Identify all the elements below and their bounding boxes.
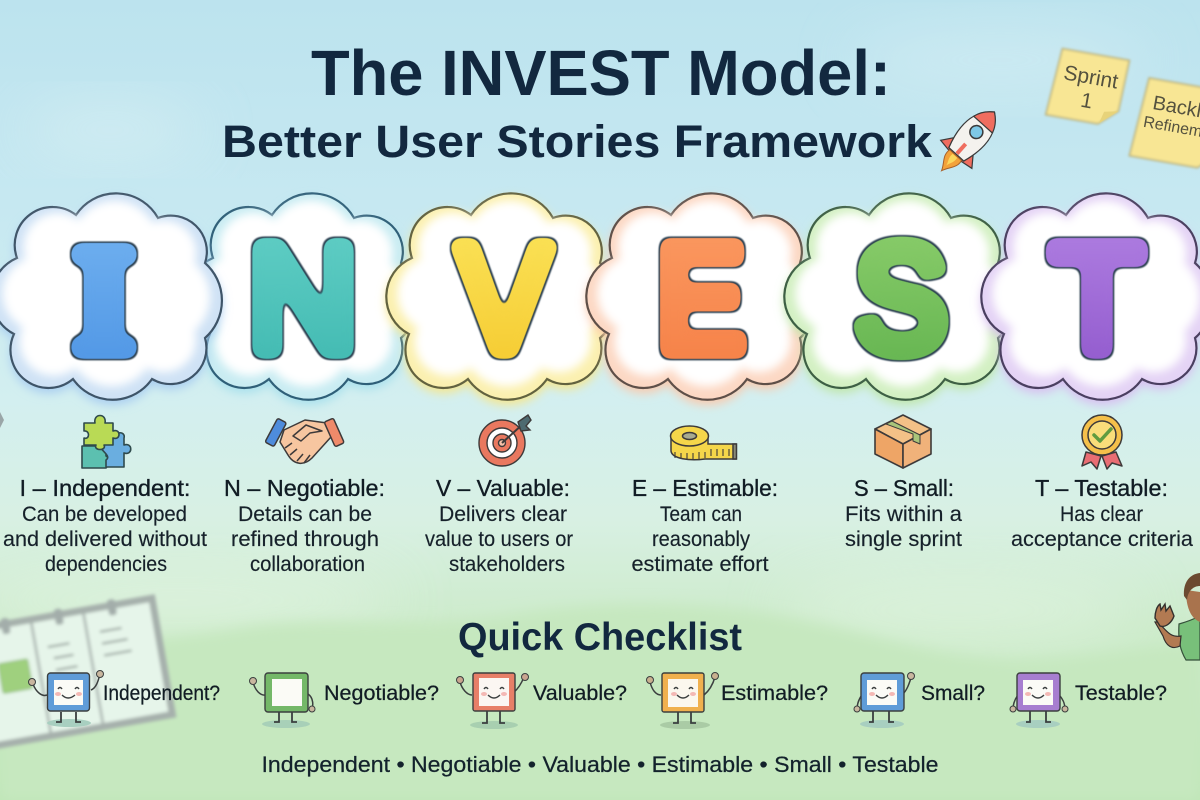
panel: cloud V bbox=[386, 193, 617, 405]
illustration: waving person bbox=[1155, 573, 1200, 660]
checklist item: Testable bbox=[1010, 673, 1167, 728]
icon: cardboard box bbox=[875, 415, 931, 468]
text block: Independent: I – Independent: bbox=[20, 475, 190, 501]
text block: Independent: dependencies bbox=[45, 553, 167, 576]
text block: Estimable: estimate effort bbox=[632, 553, 769, 576]
heading: Quick Checklist: Quick Checklist bbox=[458, 616, 742, 659]
text block: Negotiable: refined through bbox=[231, 528, 379, 551]
icon: target with arrow bbox=[479, 415, 531, 466]
text block: Testable: Has clear bbox=[1060, 503, 1143, 526]
letter E: E bbox=[657, 214, 745, 382]
checklist item: Negotiable bbox=[250, 673, 439, 728]
sticky note: Backlog Refinement bbox=[1129, 77, 1200, 171]
text block: Valuable: value to users or bbox=[425, 528, 573, 551]
mascot: orange bbox=[646, 672, 718, 729]
text block: Valuable: stakeholders bbox=[449, 553, 565, 576]
text block: Valuable bbox=[425, 475, 573, 576]
checklist item: Small bbox=[854, 672, 985, 728]
icon: puzzle bbox=[82, 416, 131, 468]
text block: Independent: and delivered without bbox=[3, 528, 207, 551]
checklist item: Estimable bbox=[646, 672, 828, 729]
text block: Estimable bbox=[632, 475, 778, 576]
mascot: green bbox=[250, 673, 315, 728]
label: Estimable? bbox=[721, 681, 828, 705]
text block: Small: single sprint bbox=[845, 528, 962, 551]
icon: rocket bbox=[926, 98, 1010, 185]
title line 2: Better User Stories Framework bbox=[222, 116, 933, 167]
title line 1: The INVEST Model: bbox=[311, 37, 891, 109]
text block: Small bbox=[845, 475, 962, 551]
panel: cloud T bbox=[981, 193, 1200, 405]
text block: Testable: acceptance criteria bbox=[1011, 528, 1193, 551]
text block: Estimable: reasonably bbox=[652, 528, 750, 551]
panel: cloud I bbox=[0, 193, 222, 405]
letter V: V bbox=[458, 215, 550, 382]
letter I: I bbox=[75, 217, 133, 383]
illustration: kanban board bbox=[0, 592, 172, 748]
icon: award badge bbox=[1082, 415, 1122, 469]
mascot: purple bbox=[1010, 673, 1068, 728]
checklist item: Valuable bbox=[456, 673, 627, 729]
text block: Estimable: Team can bbox=[660, 503, 742, 526]
footer summary line: Independent • Negotiable • Valuable • Estimable • Small • Testable bbox=[262, 752, 938, 777]
icon: measuring tape bbox=[670, 426, 736, 460]
note text: Sprint bbox=[1062, 61, 1120, 94]
mascot: blue small bbox=[854, 672, 914, 728]
text block: Small: Fits within a bbox=[845, 503, 962, 526]
text block: Valuable: Delivers clear bbox=[439, 503, 567, 526]
partial icon at left edge bbox=[0, 412, 4, 428]
label: Valuable? bbox=[533, 681, 627, 705]
text block: Negotiable: collaboration bbox=[250, 553, 365, 576]
icon: handshake bbox=[265, 418, 344, 463]
mascot: red bbox=[456, 673, 528, 729]
letter S: S bbox=[855, 215, 947, 382]
label: Independent? bbox=[103, 681, 220, 705]
text block: Testable bbox=[1011, 475, 1193, 551]
text block: Valuable: V – Valuable: bbox=[436, 475, 570, 501]
text block: Small: S – Small: bbox=[854, 475, 954, 501]
text block: Negotiable bbox=[224, 475, 385, 576]
heading: title bbox=[222, 37, 933, 167]
label: Negotiable? bbox=[324, 681, 439, 705]
mascot: blue bbox=[28, 670, 104, 727]
label: Small? bbox=[921, 681, 985, 705]
text block: Independent: Can be developed bbox=[22, 503, 187, 526]
text block: Independent bbox=[3, 475, 207, 576]
letter N: N bbox=[249, 214, 357, 382]
label: Testable? bbox=[1075, 681, 1167, 705]
checklist item: Independent bbox=[28, 670, 220, 727]
text block: Negotiable: N – Negotiable: bbox=[224, 475, 385, 501]
sticky note: Sprint 1 bbox=[1046, 48, 1129, 127]
text block: Negotiable: Details can be bbox=[238, 503, 372, 526]
text block: Testable: T – Testable: bbox=[1035, 475, 1168, 501]
panel: cloud S bbox=[784, 193, 1015, 405]
letter T: T bbox=[1051, 214, 1143, 382]
sticky note: Sprint 1: 1 bbox=[1079, 89, 1094, 113]
panel: cloud N bbox=[187, 193, 418, 405]
panel: cloud E bbox=[586, 193, 817, 405]
text block: Estimable: E – Estimable: bbox=[632, 475, 778, 501]
